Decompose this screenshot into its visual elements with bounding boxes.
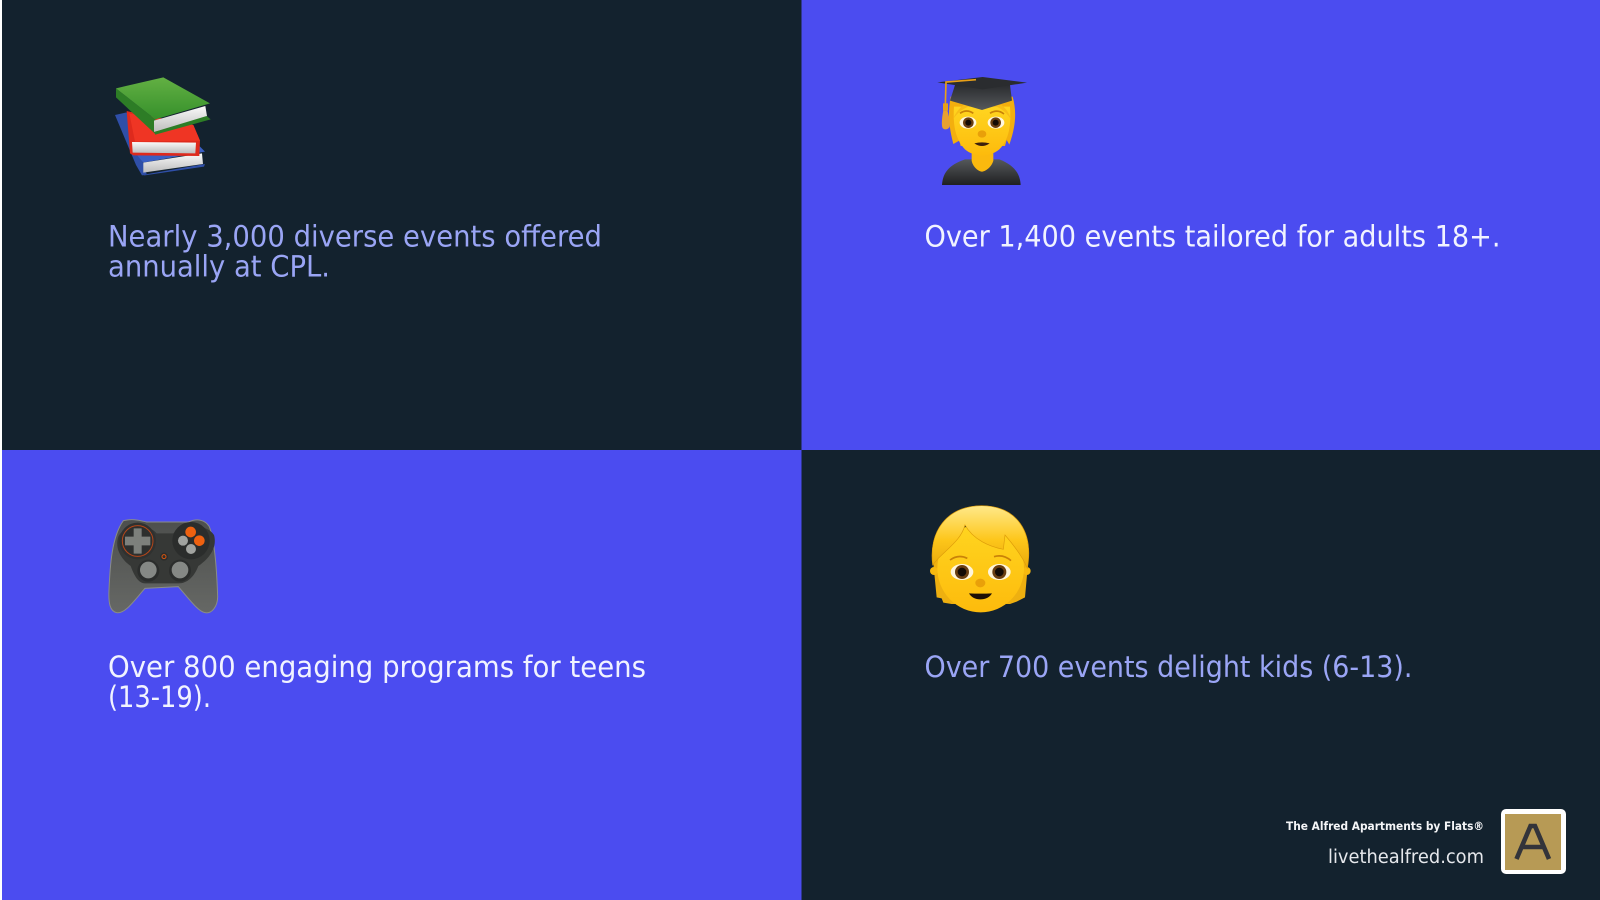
brand block <box>1286 809 1566 874</box>
panel: teen programs <box>2 450 802 900</box>
description: teen programs second line: (13-19). <box>108 680 211 714</box>
logo <box>1501 809 1566 874</box>
icon: stack of books <box>115 77 211 175</box>
description: teen programs: Over 800 engaging programs for teens <box>108 650 646 684</box>
description: kids events: Over 700 events delight kids (6-13). <box>924 650 1412 684</box>
icon: child face <box>930 506 1031 612</box>
brand name: The Alfred Apartments by Flats® <box>1286 819 1484 833</box>
icon: student with graduation cap <box>937 77 1027 185</box>
description: adult events: Over 1,400 events tailored for adults 18+. <box>924 220 1500 254</box>
website: livethealfred.com <box>1328 847 1484 868</box>
panel: adult events <box>802 0 1600 450</box>
description: total events second line: annually at CPL. <box>108 250 330 284</box>
panel: kids events <box>802 450 1600 900</box>
icon: game controller <box>109 520 218 613</box>
panel: total events <box>2 0 802 450</box>
description: total events: Nearly 3,000 diverse events offered <box>108 220 602 254</box>
